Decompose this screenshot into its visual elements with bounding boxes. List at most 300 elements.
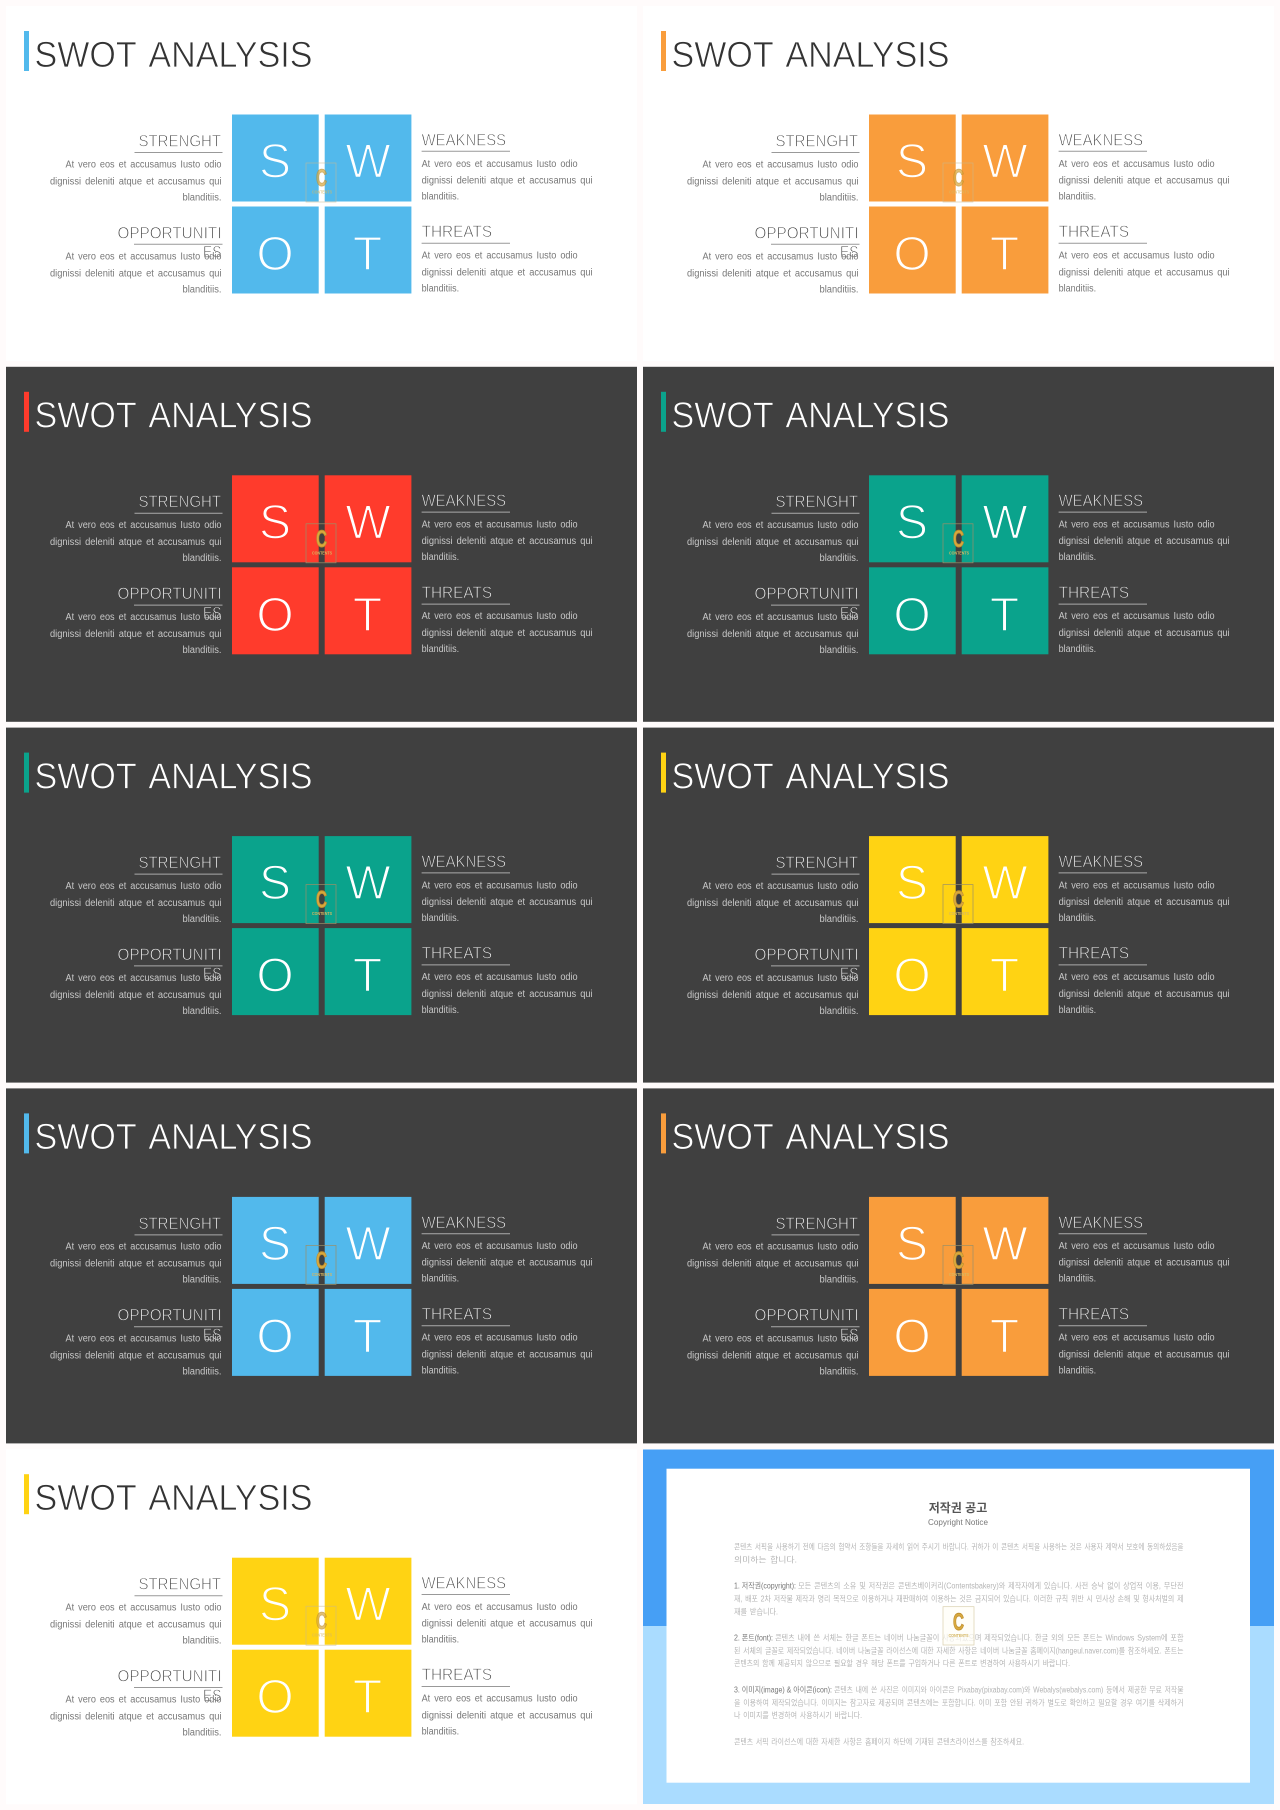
title: SWOT ANALYSIS [34, 1477, 312, 1518]
threats block: THREATS [422, 1665, 492, 1684]
logo watermark: CONTENTS [312, 1272, 332, 1277]
opportunities block: OPPORTUNITI [118, 945, 222, 964]
threats block: dignissi deleniti atque et accusamus qui [422, 1350, 593, 1361]
threats block: dignissi deleniti atque et accusamus qui [1059, 267, 1230, 278]
opportunities block: At vero eos et accusamus Iusto odio [702, 251, 859, 262]
opportunities block: dignissi deleniti atque et accusamus qui [50, 990, 222, 1001]
notice clause 3 [734, 1684, 1184, 1720]
weakness block: WEAKNESS [1059, 491, 1143, 510]
threats block: blanditiis. [422, 283, 459, 294]
strength block: blanditiis. [820, 914, 858, 925]
notice clause 3: 3. 이미지(image) & 아이콘(icon): [734, 1684, 832, 1694]
SWOT grid: W [345, 857, 391, 910]
SWOT grid: S [259, 496, 291, 549]
SWOT grid: W [345, 1218, 391, 1271]
strength block: At vero eos et accusamus Iusto odio [66, 1242, 222, 1253]
strength block: blanditiis. [820, 553, 858, 564]
weakness block [1059, 130, 1230, 202]
SWOT grid [869, 1197, 1048, 1376]
opportunities block: ES [203, 243, 222, 262]
SWOT grid [232, 836, 411, 1015]
panel: yellow SWOT on dark [643, 728, 1274, 1083]
logo watermark [306, 885, 336, 924]
strength block: At vero eos et accusamus Iusto odio [66, 159, 222, 170]
threats block: dignissi deleniti atque et accusamus qui [422, 267, 593, 278]
weakness block: WEAKNESS [1059, 852, 1143, 871]
opportunities block: ES [203, 1686, 222, 1705]
logo watermark: C [316, 1247, 327, 1274]
strength block: At vero eos et accusamus Iusto odio [702, 881, 859, 892]
logo watermark: CONTENTS [312, 550, 332, 555]
panel: copyright notice [643, 1450, 1274, 1804]
threats block: At vero eos et accusamus Iusto odio [422, 1333, 578, 1344]
opportunities block: ES [840, 603, 858, 622]
strength block [50, 1214, 222, 1286]
opportunities block: OPPORTUNITI [118, 223, 222, 242]
opportunities block: blanditiis. [182, 284, 222, 295]
notice clause 2 [734, 1632, 1184, 1668]
opportunities block [50, 945, 222, 1017]
SWOT grid [232, 114, 411, 294]
strength block: dignissi deleniti atque et accusamus qui [687, 537, 858, 548]
SWOT grid: O [256, 589, 294, 642]
weakness block: dignissi deleniti atque et accusamus qui [422, 175, 593, 186]
strength block: blanditiis. [182, 914, 222, 925]
SWOT grid [232, 475, 411, 654]
weakness block: At vero eos et accusamus Iusto odio [422, 1602, 578, 1613]
threats block [422, 1304, 593, 1377]
opportunities block: At vero eos et accusamus Iusto odio [66, 973, 222, 984]
notice clause 3: 콘텐츠 내에 쓴 사진은 이미지와 아이콘은 Pixabay(pixabay.com)와 Webalys(webalys.com) 등에서 제공한 무료 저작물 [834, 1684, 1184, 1694]
strength block [687, 131, 860, 203]
logo watermark [306, 1606, 336, 1645]
opportunities block [687, 1306, 860, 1378]
weakness block: At vero eos et accusamus Iusto odio [1059, 880, 1215, 891]
opportunities block: ES [840, 243, 858, 262]
strength block: dignissi deleniti atque et accusamus qui [50, 537, 222, 548]
strength block: At vero eos et accusamus Iusto odio [66, 520, 222, 531]
logo watermark [306, 524, 336, 563]
weakness block: blanditiis. [1059, 913, 1096, 924]
notice closing line: 콘텐츠 서픽 라이선스에 대한 자세한 사항은 홈페이지 하단에 기재된 콘텐츠라이선스를 참조하세요. [734, 1736, 1024, 1746]
strength block: dignissi deleniti atque et accusamus qui [687, 898, 858, 909]
opportunities block: At vero eos et accusamus Iusto odio [66, 1694, 222, 1705]
strength block: STRENGHT [138, 1214, 221, 1233]
opportunities block: dignissi deleniti atque et accusamus qui [687, 629, 858, 640]
notice sheet [666, 1469, 1250, 1783]
SWOT grid: O [893, 1310, 931, 1363]
weakness block: dignissi deleniti atque et accusamus qui [1059, 175, 1230, 186]
SWOT grid: O [893, 950, 931, 1003]
notice heading: Copyright Notice [928, 1517, 988, 1527]
opportunities block: ES [203, 964, 222, 983]
opportunities block: blanditiis. [182, 645, 222, 656]
opportunities block [50, 1306, 222, 1378]
weakness block [422, 130, 593, 202]
SWOT grid [869, 836, 1048, 1015]
notice clause 1: 재를 받습니다. [734, 1606, 778, 1616]
notice clause 2: 된 서체의 글꼴로 제작되었습니다. 네이버 나눔글꼴 라이선스에 대한 자세한 사항은 네이버 나눔글꼴 홈페이지(hangeul.naver.com)를 참조하세요. 폰트는 [734, 1646, 1184, 1656]
SWOT grid: W [345, 496, 391, 549]
notice heading: 저작권 공고 [929, 1500, 987, 1515]
weakness block [422, 852, 593, 924]
weakness block: blanditiis. [1059, 1274, 1096, 1285]
threats block [422, 222, 593, 294]
notice clause 1: 모든 콘텐츠의 소유 및 저작권은 콘텐츠베이커리(Contentsbakery)와 제작자에게 있습니다. 사전 승낙 없이 상업적 이용, 무단전 [798, 1580, 1184, 1590]
threats block [422, 944, 593, 1016]
weakness block: WEAKNESS [1059, 130, 1143, 149]
notice intro [734, 1542, 1184, 1564]
threats block: dignissi deleniti atque et accusamus qui [1059, 989, 1230, 1000]
weakness block: dignissi deleniti atque et accusamus qui [1059, 536, 1230, 547]
weakness block: At vero eos et accusamus Iusto odio [422, 520, 578, 531]
SWOT grid: T [353, 589, 382, 642]
panel: red SWOT on dark [6, 367, 637, 722]
SWOT grid: T [990, 589, 1019, 642]
opportunities block: OPPORTUNITI [118, 584, 222, 603]
SWOT grid: T [353, 1310, 382, 1363]
opportunities block: ES [203, 1325, 222, 1344]
threats block: At vero eos et accusamus Iusto odio [422, 972, 578, 983]
opportunities block: At vero eos et accusamus Iusto odio [66, 1334, 222, 1345]
weakness block: At vero eos et accusamus Iusto odio [1059, 159, 1215, 170]
title: SWOT ANALYSIS [672, 34, 950, 75]
SWOT grid: S [896, 1218, 928, 1271]
logo watermark: CONTENTS [312, 911, 332, 916]
opportunities block: At vero eos et accusamus Iusto odio [702, 612, 859, 623]
strength block [687, 1214, 860, 1286]
weakness block: dignissi deleniti atque et accusamus qui [422, 1258, 593, 1269]
SWOT grid: O [256, 950, 294, 1003]
opportunities block: dignissi deleniti atque et accusamus qui [50, 1711, 222, 1722]
weakness block [1059, 852, 1230, 924]
strength block: blanditiis. [182, 553, 222, 564]
threats block: THREATS [422, 583, 492, 602]
SWOT grid: T [353, 228, 382, 281]
SWOT grid: T [990, 228, 1019, 281]
SWOT grid [232, 1197, 411, 1376]
strength block: At vero eos et accusamus Iusto odio [702, 1242, 859, 1253]
logo watermark [306, 163, 336, 202]
weakness block: blanditiis. [422, 1274, 459, 1285]
strength block: blanditiis. [182, 192, 222, 203]
opportunities block: OPPORTUNITI [118, 1306, 222, 1325]
opportunities block [50, 584, 222, 656]
SWOT grid: W [982, 136, 1028, 188]
accent bar [24, 392, 29, 432]
logo watermark: CONTENTS [949, 911, 969, 916]
notice intro: 의미하는 합니다. [734, 1554, 797, 1564]
strength block: blanditiis. [182, 1635, 222, 1646]
threats block: dignissi deleniti atque et accusamus qui [1059, 1350, 1230, 1361]
weakness block: WEAKNESS [1059, 1213, 1143, 1232]
panel: blue SWOT on white [6, 6, 637, 361]
title: SWOT ANALYSIS [672, 395, 950, 436]
accent bar [661, 753, 666, 793]
notice clause 1: 1. 저작권(copyright): [734, 1580, 796, 1590]
SWOT grid: S [896, 857, 928, 910]
threats block: blanditiis. [1059, 1366, 1096, 1377]
strength block: blanditiis. [820, 192, 858, 203]
SWOT grid [232, 1558, 411, 1737]
weakness block: WEAKNESS [422, 130, 506, 149]
opportunities block: ES [840, 1325, 858, 1344]
weakness block: dignissi deleniti atque et accusamus qui [422, 1618, 593, 1629]
strength block: STRENGHT [138, 853, 221, 872]
SWOT grid: T [353, 1671, 382, 1724]
panel: teal SWOT on dark (right) [643, 367, 1274, 722]
weakness block: WEAKNESS [422, 1574, 506, 1593]
strength block [50, 853, 222, 925]
opportunities block: At vero eos et accusamus Iusto odio [66, 612, 222, 623]
strength block: At vero eos et accusamus Iusto odio [66, 1602, 222, 1613]
opportunities block: dignissi deleniti atque et accusamus qui [50, 268, 222, 279]
SWOT grid: T [990, 1310, 1019, 1363]
weakness block: dignissi deleniti atque et accusamus qui [1059, 897, 1230, 908]
threats block: At vero eos et accusamus Iusto odio [422, 611, 578, 622]
threats block [1059, 1304, 1230, 1377]
threats block: THREATS [422, 1304, 492, 1323]
title: SWOT ANALYSIS [34, 395, 312, 436]
panel: yellow SWOT on white [6, 1449, 637, 1804]
strength block [687, 853, 860, 925]
logo watermark [943, 1245, 973, 1284]
accent bar [661, 392, 666, 432]
strength block: STRENGHT [138, 492, 221, 511]
threats block: dignissi deleniti atque et accusamus qui [422, 1710, 593, 1721]
logo watermark [943, 524, 973, 563]
weakness block: WEAKNESS [422, 491, 506, 510]
strength block: blanditiis. [182, 1275, 222, 1286]
threats block: dignissi deleniti atque et accusamus qui [422, 628, 593, 639]
threats block [1059, 222, 1230, 294]
SWOT grid: W [982, 1218, 1028, 1271]
notice clause 1 [734, 1580, 1184, 1616]
strength block: STRENGHT [138, 1575, 221, 1594]
opportunities block: OPPORTUNITI [754, 584, 858, 603]
logo watermark [943, 163, 973, 202]
opportunities block: blanditiis. [182, 1006, 222, 1017]
logo watermark: CONTENTS [949, 550, 969, 555]
opportunities block: blanditiis. [182, 1367, 222, 1378]
SWOT grid: O [893, 589, 931, 642]
strength block: blanditiis. [820, 1275, 858, 1286]
panel: orange SWOT on white [643, 6, 1274, 361]
SWOT grid: S [259, 1218, 291, 1271]
title: SWOT ANALYSIS [672, 755, 950, 796]
logo watermark: C [316, 165, 327, 192]
logo watermark: CONTENTS [949, 1272, 969, 1277]
logo watermark: CONTENTS [312, 1633, 332, 1638]
notice heading [928, 1500, 988, 1527]
strength block: STRENGHT [138, 131, 221, 150]
threats block: THREATS [422, 222, 492, 241]
strength block: dignissi deleniti atque et accusamus qui [50, 1259, 222, 1270]
opportunities block: dignissi deleniti atque et accusamus qui [687, 268, 858, 279]
SWOT grid: O [893, 228, 931, 281]
threats block: THREATS [1059, 944, 1129, 963]
SWOT grid: T [990, 950, 1019, 1003]
threats block: At vero eos et accusamus Iusto odio [422, 1693, 578, 1704]
notice clause 1: 재, 배포 2차 저작물 제작과 영리 목적으로 이용하거나 재판매하여 이용하는 것은 금지되어 있습니다. 이러한 규칙 위반 시 민사상 손해 및 형사처벌의 제 [734, 1594, 1184, 1604]
SWOT grid: W [982, 496, 1028, 549]
notice intro: 콘텐츠 서픽을 사용하기 전에 다음의 협약서 조항들을 자세히 읽어 주시기 바랍니다. 귀하가 이 콘텐츠 서픽을 사용하는 것은 사용자 계약서 보호에 동의하셨음을 [734, 1542, 1184, 1552]
opportunities block: OPPORTUNITI [118, 1666, 222, 1685]
threats block: blanditiis. [422, 644, 459, 655]
logo watermark: C [316, 887, 327, 914]
logo watermark: C [953, 1247, 964, 1274]
strength block: STRENGHT [776, 131, 858, 150]
SWOT grid: O [256, 228, 294, 281]
threats block: dignissi deleniti atque et accusamus qui [422, 989, 593, 1000]
panel: orange SWOT on dark [643, 1088, 1274, 1443]
threats block: blanditiis. [422, 1726, 459, 1737]
logo watermark: C [953, 165, 964, 192]
accent bar [661, 31, 666, 71]
weakness block: blanditiis. [1059, 552, 1096, 563]
opportunities block: dignissi deleniti atque et accusamus qui [50, 1351, 222, 1362]
notice clause 2: 2. 폰트(font): [734, 1634, 773, 1642]
SWOT grid: S [896, 136, 928, 188]
strength block: dignissi deleniti atque et accusamus qui [50, 176, 222, 187]
threats block: blanditiis. [1059, 644, 1096, 655]
threats block [1059, 583, 1230, 655]
opportunities block [687, 945, 860, 1017]
SWOT grid: O [256, 1310, 294, 1363]
opportunities block [50, 1666, 222, 1738]
logo watermark: C [316, 1608, 327, 1635]
SWOT grid: W [982, 857, 1028, 910]
logo watermark [943, 1607, 974, 1645]
title: SWOT ANALYSIS [34, 1116, 312, 1157]
opportunities block: ES [203, 603, 222, 622]
opportunities block: At vero eos et accusamus Iusto odio [702, 973, 859, 984]
threats block: THREATS [422, 944, 492, 963]
threats block: THREATS [1059, 583, 1129, 602]
threats block: At vero eos et accusamus Iusto odio [1059, 250, 1215, 261]
weakness block [422, 491, 593, 563]
accent bar [24, 1474, 29, 1514]
logo watermark: C [953, 526, 964, 553]
opportunities block: dignissi deleniti atque et accusamus qui [687, 1351, 858, 1362]
weakness block: At vero eos et accusamus Iusto odio [1059, 520, 1215, 531]
weakness block: At vero eos et accusamus Iusto odio [422, 1241, 578, 1252]
weakness block: blanditiis. [422, 552, 459, 563]
strength block: dignissi deleniti atque et accusamus qui [50, 1619, 222, 1630]
logo watermark: C [953, 887, 964, 914]
notice clause 2: 콘텐츠의 함께 제공되지 않으므로 필요할 경우 해당 폰트를 구입하거나 다른 폰트로 변경하여 사용하시기 바랍니다. [734, 1658, 1070, 1668]
opportunities block: dignissi deleniti atque et accusamus qui [687, 990, 858, 1001]
opportunities block: blanditiis. [820, 284, 858, 295]
SWOT grid: S [259, 1579, 291, 1632]
panel: teal SWOT on dark (left) [6, 728, 637, 1083]
threats block: blanditiis. [1059, 1005, 1096, 1016]
weakness block: At vero eos et accusamus Iusto odio [1059, 1241, 1215, 1252]
logo watermark: C [316, 526, 327, 553]
threats block: THREATS [1059, 1304, 1129, 1323]
weakness block [422, 1213, 593, 1285]
weakness block: dignissi deleniti atque et accusamus qui [1059, 1258, 1230, 1269]
threats block [1059, 944, 1230, 1016]
strength block [50, 1575, 222, 1646]
logo watermark: C [953, 1609, 964, 1636]
threats block: blanditiis. [422, 1005, 459, 1016]
weakness block: blanditiis. [422, 1634, 459, 1645]
opportunities block [50, 223, 222, 295]
threats block: At vero eos et accusamus Iusto odio [422, 250, 578, 261]
accent bar [24, 1113, 29, 1153]
SWOT grid: T [353, 950, 382, 1003]
opportunities block: dignissi deleniti atque et accusamus qui [50, 629, 222, 640]
accent bar [24, 31, 29, 71]
strength block: STRENGHT [776, 492, 858, 511]
opportunities block: blanditiis. [820, 645, 858, 656]
logo watermark: CONTENTS [948, 1633, 968, 1638]
weakness block: blanditiis. [422, 913, 459, 924]
opportunities block: blanditiis. [820, 1367, 858, 1378]
accent bar [24, 753, 29, 793]
SWOT grid: W [345, 136, 391, 188]
weakness block: WEAKNESS [422, 852, 506, 871]
weakness block: WEAKNESS [422, 1213, 506, 1232]
SWOT grid: S [259, 857, 291, 910]
threats block [422, 1665, 593, 1738]
opportunities block: OPPORTUNITI [754, 945, 858, 964]
threats block: At vero eos et accusamus Iusto odio [1059, 1333, 1215, 1344]
notice clause 3: 나 이미지를 변경하여 사용하시기 바랍니다. [734, 1710, 862, 1720]
strength block: STRENGHT [776, 853, 858, 872]
strength block [50, 492, 222, 564]
logo watermark [943, 885, 973, 924]
weakness block: At vero eos et accusamus Iusto odio [422, 880, 578, 891]
threats block: At vero eos et accusamus Iusto odio [1059, 972, 1215, 983]
opportunities block: blanditiis. [820, 1006, 858, 1017]
strength block [687, 492, 860, 564]
strength block [50, 131, 222, 203]
strength block: At vero eos et accusamus Iusto odio [66, 881, 222, 892]
SWOT grid: W [345, 1579, 391, 1632]
threats block: THREATS [1059, 222, 1129, 241]
opportunities block: At vero eos et accusamus Iusto odio [66, 251, 222, 262]
threats block: dignissi deleniti atque et accusamus qui [1059, 628, 1230, 639]
opportunities block [687, 223, 860, 295]
weakness block: dignissi deleniti atque et accusamus qui [422, 897, 593, 908]
SWOT grid [869, 475, 1048, 654]
weakness block: blanditiis. [422, 191, 459, 202]
SWOT grid: S [896, 496, 928, 549]
opportunities block [687, 584, 860, 656]
notice clause 2: 콘텐츠 내에 쓴 서체는 한글 폰트는 네이버 나눔글꼴이 사용되었으며 제작되었습니다. 한글 외의 모든 폰트는 Windows System에 포함 [775, 1632, 1184, 1642]
strength block: dignissi deleniti atque et accusamus qui [687, 176, 858, 187]
logo watermark [306, 1245, 336, 1284]
SWOT grid: S [259, 136, 291, 188]
threats block [422, 583, 593, 655]
threats block: blanditiis. [422, 1366, 459, 1377]
opportunities block: OPPORTUNITI [754, 223, 858, 242]
title: SWOT ANALYSIS [34, 755, 312, 796]
panel: blue SWOT on dark [6, 1088, 637, 1443]
opportunities block: blanditiis. [182, 1727, 222, 1738]
strength block: STRENGHT [776, 1214, 858, 1233]
title: SWOT ANALYSIS [34, 34, 312, 75]
logo watermark: CONTENTS [949, 190, 969, 194]
strength block: At vero eos et accusamus Iusto odio [702, 520, 859, 531]
weakness block: blanditiis. [1059, 191, 1096, 202]
strength block: dignissi deleniti atque et accusamus qui [687, 1259, 858, 1270]
opportunities block: ES [840, 964, 858, 983]
weakness block [422, 1574, 593, 1646]
title: SWOT ANALYSIS [672, 1116, 950, 1157]
